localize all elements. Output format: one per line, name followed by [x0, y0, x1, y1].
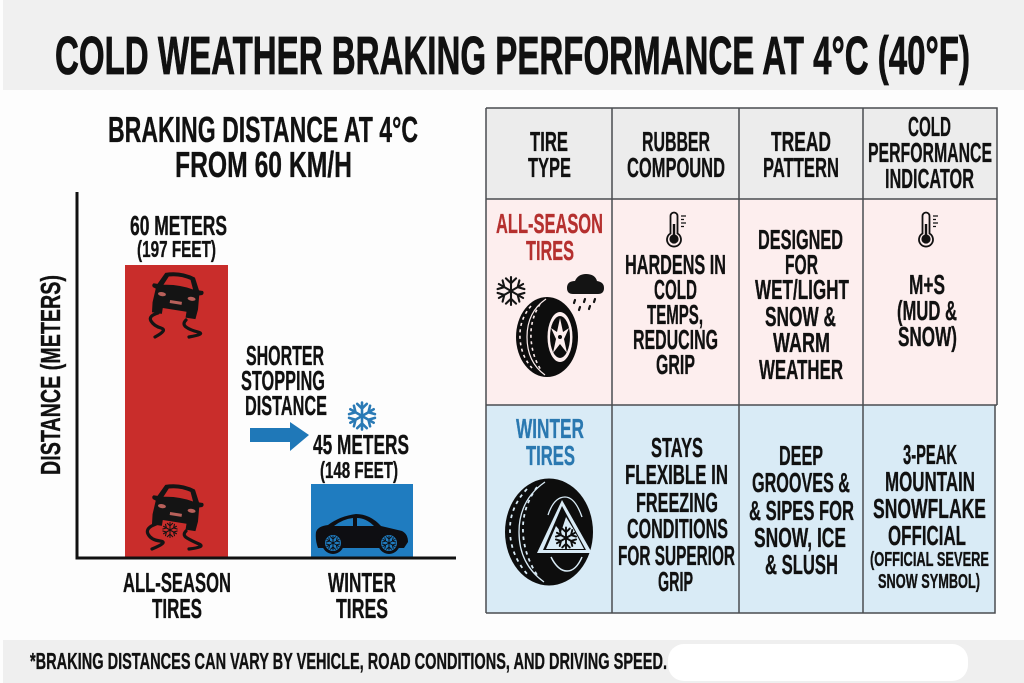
category label: all-season — [123, 567, 231, 624]
value label: all-season — [130, 210, 227, 262]
cell: winter rubber compound: STAYS — [651, 432, 703, 463]
cell: winter tread pattern: & SLUSH — [765, 549, 838, 580]
row heading: winter tires: TIRES — [526, 440, 575, 471]
cell: all-season cold indicator: M+S — [909, 269, 945, 300]
cell: winter rubber compound: GRIP — [658, 566, 693, 597]
cell: winter tread pattern: & SIPES FOR — [749, 495, 854, 526]
value label: winter: 45 METERS — [313, 429, 409, 460]
icon: skidding car top — [148, 269, 206, 337]
row heading: winter tires: WINTER — [516, 413, 584, 444]
cell: winter tread pattern: SNOW, ICE — [754, 522, 846, 553]
cell: all-season tread pattern: WET/LIGHT — [755, 274, 849, 305]
value label: winter: (148 FEET) — [320, 457, 398, 483]
cell: all-season rubber compound: REDUCING — [633, 324, 718, 355]
icon: winter tire — [505, 478, 593, 586]
axes — [77, 192, 456, 558]
cell: winter rubber compound: FLEXIBLE IN — [625, 459, 728, 490]
cell: all-season cold indicator: SNOW) — [898, 321, 957, 352]
comparison table — [486, 108, 997, 613]
callout: shorter stopping distance: SHORTER — [246, 340, 324, 371]
y axis label: DISTANCE (METERS) — [35, 275, 66, 475]
cell: winter cold indicator — [870, 439, 989, 593]
icon: snowflake — [496, 277, 526, 305]
footer band — [3, 640, 1024, 683]
icon: all-season tire — [516, 297, 578, 377]
cell: all-season rubber compound: GRIP — [656, 349, 695, 380]
row heading: all-season tires: ALL-SEASON — [496, 208, 603, 239]
table header: RUBBER — [642, 126, 710, 157]
panel: braking distance chart — [35, 109, 456, 624]
icon: rain cloud — [567, 274, 604, 310]
footnote: *BRAKING DISTANCES CAN VARY BY VEHICLE, ROAD CONDITIONS, AND DRIVING SPEED. — [30, 648, 667, 674]
chart heading — [108, 109, 418, 185]
cell: winter tread pattern: DEEP — [779, 440, 823, 471]
category label: winter: TIRES — [336, 593, 388, 624]
value label: all-season: 60 METERS — [130, 210, 227, 241]
cell: all-season cold indicator — [897, 212, 957, 352]
table header: TREAD — [771, 126, 831, 157]
title banner — [3, 0, 1024, 90]
table header: TIRE — [530, 126, 568, 157]
chart heading: FROM 60 KM/H — [175, 144, 352, 185]
table header: PATTERN — [763, 152, 839, 183]
cell: winter tread pattern — [749, 440, 854, 580]
value label: winter — [313, 429, 409, 483]
arrow — [250, 422, 309, 451]
callout: shorter stopping distance — [241, 340, 327, 421]
cell: all-season tread pattern — [755, 224, 849, 385]
icon: thermometer — [919, 212, 938, 247]
cell: all-season rubber compound: COLD — [654, 274, 697, 305]
icon: car with snow wheels — [316, 514, 408, 554]
table header: TYPE — [528, 152, 571, 183]
icon: thermometer — [667, 212, 686, 247]
row heading: winter tires — [516, 413, 584, 471]
cell: all-season cold indicator: (MUD & — [897, 295, 957, 326]
table header: COLD — [908, 111, 951, 142]
icon: snowflake — [348, 402, 376, 430]
cell: all-season rubber compound: HARDENS IN — [625, 249, 726, 280]
cell: all-season rubber compound: TEMPS, — [647, 299, 703, 330]
cell: winter rubber compound — [618, 432, 735, 597]
cell: winter cold indicator: OFFICIAL — [888, 520, 966, 551]
category label: all-season: ALL-SEASON — [123, 567, 231, 598]
cell: winter rubber compound: CONDITIONS — [627, 513, 728, 544]
cell: winter rubber compound: FREEZING — [636, 487, 718, 518]
cell: all-season tread pattern: WARM — [773, 327, 830, 358]
callout: shorter stopping distance: STOPPING — [241, 365, 325, 396]
icon: skidding car bottom with snowflake — [147, 481, 206, 549]
category label: winter — [328, 567, 396, 624]
cell: winter rubber compound: FOR SUPERIOR — [618, 540, 735, 571]
value label: all-season: (197 FEET) — [137, 236, 216, 262]
bar: winter tires — [311, 484, 413, 558]
row heading: all-season tires — [496, 208, 603, 266]
cell: all-season tread pattern: FOR — [785, 249, 818, 280]
callout: shorter stopping distance: DISTANCE — [245, 390, 327, 421]
bar: all-season tires — [125, 265, 228, 558]
cell: all-season tread pattern: WEATHER — [759, 354, 843, 385]
cell: all-season tread pattern: SNOW & — [765, 301, 836, 332]
category label: all-season: TIRES — [152, 593, 202, 624]
chart heading: BRAKING DISTANCE AT 4°C — [108, 109, 418, 150]
table header — [528, 111, 992, 194]
cell: winter cold indicator: 3-PEAK — [903, 439, 957, 470]
cell: all-season rubber compound — [625, 212, 726, 380]
cell: all-season tread pattern: DESIGNED — [758, 224, 843, 255]
row heading: all-season tires: TIRES — [526, 235, 574, 266]
cell: winter tread pattern: GROOVES & — [752, 467, 850, 498]
category label: winter: WINTER — [328, 567, 396, 598]
table header: COMPOUND — [627, 152, 725, 183]
